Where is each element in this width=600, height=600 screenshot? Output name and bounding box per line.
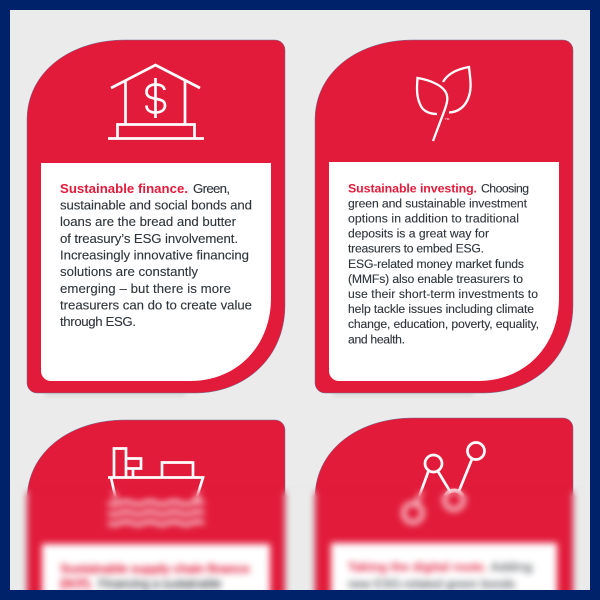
text box: sustainable supply chain finance: (SCF). xyxy=(60,576,92,591)
text box: sustainable investing: treasurers to embed ESG. xyxy=(348,242,484,256)
text box: taking the digital route: new ESG-related green bonds xyxy=(348,577,515,591)
text box: sustainable investing: change, education, poverty, equality, xyxy=(348,317,539,331)
icon: cargo ship xyxy=(108,448,204,524)
text box: sustainable investing xyxy=(329,162,559,381)
text box: sustainable finance: through ESG. xyxy=(60,314,136,329)
text box: sustainable finance: loans are the bread and butter xyxy=(60,214,237,229)
panel: sustainable finance xyxy=(27,40,285,396)
icon: leaves: TM xyxy=(445,117,450,121)
text box: sustainable supply chain finance xyxy=(42,544,270,600)
text box: sustainable investing: options in addition to traditional xyxy=(348,212,519,226)
text box: sustainable investing: Choosing xyxy=(481,181,529,195)
panel: sustainable investing xyxy=(315,40,573,396)
text box: sustainable investing: use their short-term investments to xyxy=(348,287,538,301)
text box: sustainable finance xyxy=(41,163,271,381)
text box: sustainable investing: and health. xyxy=(348,332,405,346)
text box: sustainable finance: emerging – but there is more xyxy=(60,281,231,296)
text box: sustainable finance: solutions are constantly xyxy=(60,264,198,279)
text box: sustainable finance: of treasury’s ESG involvement. xyxy=(60,231,238,246)
text box: sustainable supply chain finance: Financing a sustainable xyxy=(98,576,222,591)
text box: sustainable finance: Green, xyxy=(193,181,230,196)
text box: sustainable finance: sustainable and social bonds and xyxy=(60,198,252,213)
text box: taking the digital route: Adding xyxy=(491,560,532,574)
text box: sustainable finance: Sustainable finance. xyxy=(60,181,188,196)
text box: sustainable investing: deposits is a great way for xyxy=(348,227,489,241)
panel: sustainable supply chain finance xyxy=(27,420,285,600)
icon: leaves xyxy=(417,67,471,141)
text box: sustainable investing: ESG-related money market funds xyxy=(348,257,524,271)
text box: sustainable investing: Sustainable investing. xyxy=(348,181,477,195)
panel: taking the digital route xyxy=(315,418,573,600)
icon: bank house with dollar xyxy=(108,65,204,138)
text box: taking the digital route xyxy=(331,543,557,600)
text box: sustainable finance: treasurers can do to create value xyxy=(60,297,252,312)
text box: sustainable investing: (MMFs) also enable treasurers to xyxy=(348,272,523,286)
text box: sustainable investing: green and sustainable investment xyxy=(348,196,528,210)
text box: sustainable finance: Increasingly innovative financing xyxy=(60,248,249,262)
text box: sustainable supply chain finance: Sustainable supply chain finance xyxy=(60,561,250,576)
icon: line chart nodes xyxy=(404,442,484,522)
text box: sustainable investing: help tackle issues including climate xyxy=(348,302,534,316)
text box: taking the digital route: Taking the digital route. xyxy=(348,560,487,574)
